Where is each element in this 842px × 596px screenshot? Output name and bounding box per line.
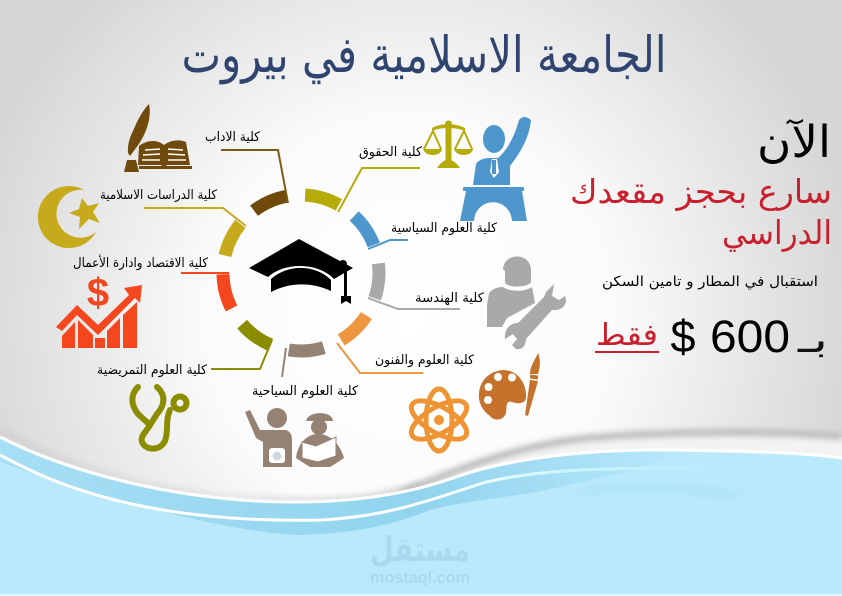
icon: tourists [245, 408, 344, 467]
icon: graduation cap [249, 239, 353, 304]
heading: reserve your seat: سارع بحجز مقعدك [570, 172, 832, 211]
watermark: مستقل [370, 530, 470, 570]
price [595, 311, 828, 362]
icon: speaker at podium [460, 117, 531, 221]
heading: academic: الدراسي [722, 213, 832, 252]
label: economics: كلية الاقتصاد وادارة الأعمال [73, 254, 209, 271]
price: بـ [797, 320, 828, 361]
watermark: mostaql.com [370, 568, 470, 587]
segment: nursing [211, 324, 272, 369]
icon: palette and brush [479, 353, 540, 420]
icon: book and quill [124, 104, 192, 172]
title: الجامعة الاسلامية في بيروت [182, 26, 666, 85]
label: engineering: كلية الهندسة [415, 291, 485, 306]
heading: now: الآن [757, 117, 831, 168]
text: airport pickup and housing: استقبال في المطار و تامين السكن [602, 274, 818, 290]
segment: political science [354, 216, 408, 249]
icon: stethoscope [132, 387, 186, 449]
label: law: كلية الحقوق [359, 145, 423, 160]
price: $ [670, 311, 696, 362]
segment: tourism [282, 348, 324, 377]
icon: scales [423, 120, 473, 168]
label: science and arts: كلية العلوم والفنون [375, 353, 475, 368]
segment: arts [221, 150, 288, 211]
price: فقط [596, 318, 658, 353]
segment: science and arts [337, 316, 423, 373]
wave footer [0, 430, 842, 596]
icon: growth chart: $ [87, 271, 109, 315]
segment: law [305, 168, 420, 212]
icon: atom [406, 389, 472, 451]
icon: crescent and star [38, 186, 100, 248]
label: tourism: كلية العلوم السياحية [252, 384, 359, 399]
icon: growth chart [56, 271, 142, 348]
label: islamic studies: كلية الدراسات الاسلامية [100, 188, 218, 203]
labels [73, 130, 498, 399]
icon: engineer with wrench [487, 256, 566, 349]
label: political science: كلية العلوم السياسية [391, 221, 498, 236]
ring diagram [144, 150, 460, 377]
watermark [370, 530, 470, 587]
segment: economics [181, 273, 232, 308]
price: 600 [710, 311, 790, 362]
promo text block [570, 117, 832, 362]
label: arts: كلية الاداب [205, 130, 261, 145]
segment: engineering [368, 264, 460, 309]
label: nursing: كلية العلوم التمريضية [97, 363, 208, 378]
segment: islamic studies [144, 208, 246, 256]
